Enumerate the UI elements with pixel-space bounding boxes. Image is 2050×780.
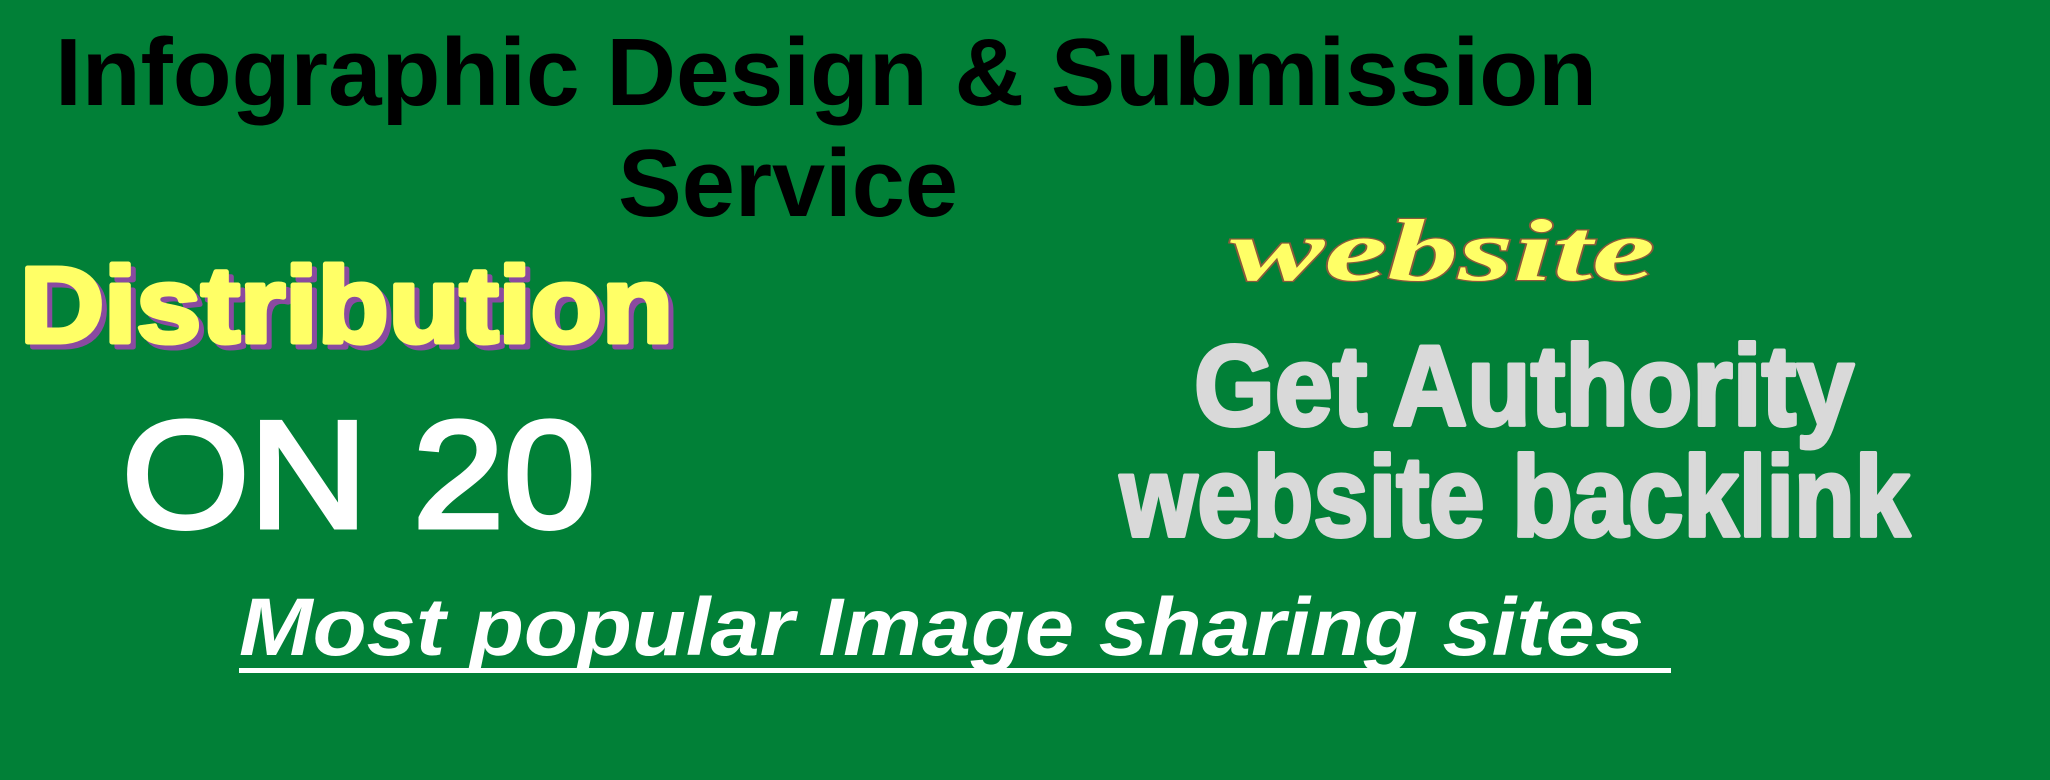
heading: Distribution: Distribution [20, 244, 673, 365]
title: Infographic Design & Submission [55, 19, 1597, 126]
text: Get Authority website backlink: Get Authority [1194, 323, 1854, 450]
heading: Distribution: Distribution [25, 249, 678, 370]
subtitle: Most popular Image sharing sites: Most popular Image sharing sites [239, 582, 1644, 673]
text: Get Authority website backlink [1119, 323, 1911, 561]
title [55, 19, 1597, 237]
heading: website: website [1230, 203, 1655, 300]
title: Service [618, 130, 958, 237]
text: Get Authority website backlink: website backlink [1119, 434, 1911, 561]
text: ON 20: ON 20 [122, 390, 595, 560]
